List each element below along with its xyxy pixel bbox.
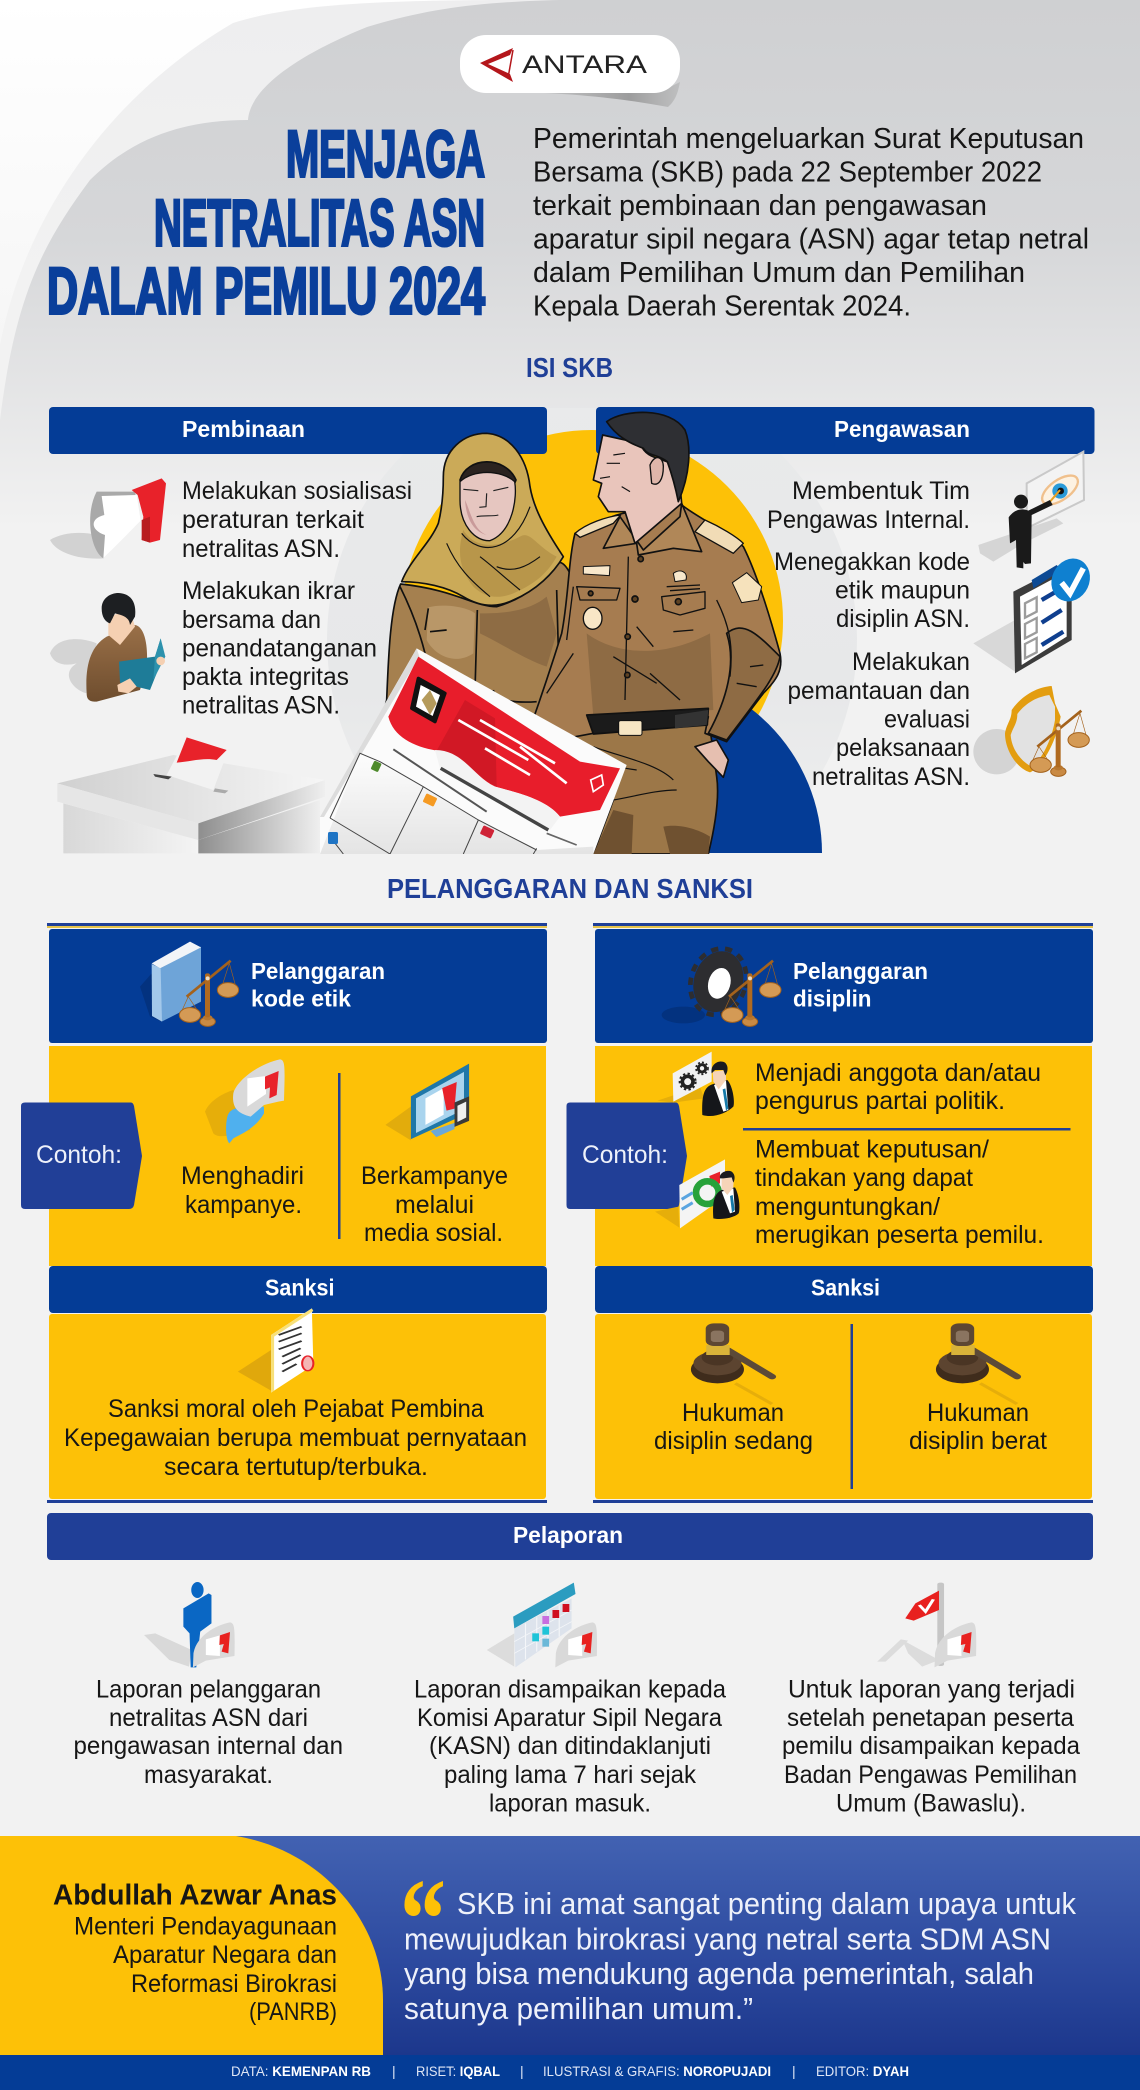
icon: gear and scales xyxy=(662,941,781,1026)
text: Pengawasan items: Membentuk Tim xyxy=(792,477,970,505)
text: Untuk laporan xyxy=(782,1676,1080,1818)
intro text: Bersama (SKB) pada 22 September 2022 xyxy=(533,156,1042,188)
text: Hukuman disiplin berat: Hukuman xyxy=(927,1399,1029,1427)
icon: ballot box xyxy=(57,737,325,853)
text: Membuat keputusan: tindakan yang dapat xyxy=(755,1164,973,1192)
text: Pengawasan items: pelaksanaan xyxy=(836,734,970,762)
tab: Contoh right: Contoh: xyxy=(582,1141,668,1169)
text: Pengawasan items: Melakukan xyxy=(852,648,970,676)
text: Pembinaan items: netralitas ASN. xyxy=(182,535,340,563)
text: Pembinaan items xyxy=(182,477,412,720)
text: Untuk laporan: Untuk laporan yang terjadi xyxy=(788,1676,1075,1704)
tab: Contoh left: Contoh: xyxy=(36,1141,122,1169)
footer credits: ILUSTRASI & GRAFIS: NOROPUJADI xyxy=(543,2063,771,2079)
panel: speaker block: Abdullah Azwar Anas xyxy=(53,1880,337,1912)
panel header: Pengawasan: Pengawasan xyxy=(834,416,970,442)
icon: checklist clipboard xyxy=(973,552,1097,673)
quote text: SKB ini amat sangat penting dalam upaya untuk xyxy=(457,1886,1076,1921)
text: Pembinaan items: Melakukan ikrar xyxy=(182,577,355,605)
icon: flag report xyxy=(877,1583,976,1667)
tab: Contoh left xyxy=(21,1102,142,1209)
panel: speaker block xyxy=(0,1836,383,2055)
text: Pengawasan items: netralitas ASN. xyxy=(812,763,970,791)
figure: man xyxy=(530,412,781,854)
text: Laporan pelanggaran: Laporan pelanggaran xyxy=(96,1676,321,1704)
panel: right column (disiplin) xyxy=(593,923,1093,1503)
panel header: Pelaporan xyxy=(47,1513,1093,1560)
text: Untuk laporan: pemilu disampaikan kepada xyxy=(782,1732,1080,1760)
text: Membuat keputusan: Membuat keputusan/ xyxy=(755,1136,989,1164)
title: MENJAGA xyxy=(286,116,485,190)
heading: Sanksi left: Sanksi xyxy=(265,1274,334,1300)
divider and text: Menghadiri kampanye: Menghadiri xyxy=(181,1162,304,1190)
logo: Antara xyxy=(460,35,680,107)
text: Menjadi anggota: Menjadi anggota dan/atau xyxy=(755,1059,1041,1087)
footer credits: | xyxy=(792,2063,796,2079)
icon: statement document xyxy=(238,1308,313,1393)
title xyxy=(47,116,485,328)
text: Berkampanye melalui media sosial: Berkampanye xyxy=(361,1162,508,1190)
icon: party member with gears xyxy=(657,1052,734,1116)
divider and text: Hukuman disiplin sedang xyxy=(654,1324,853,1489)
intro text: Kepala Daerah Serentak 2024. xyxy=(533,290,911,322)
heading: Pelanggaran disiplin xyxy=(793,958,928,1012)
intro text xyxy=(533,123,1089,322)
text: Pembinaan items: bersama dan xyxy=(182,606,321,634)
panel: speaker block: Aparatur Negara dan xyxy=(113,1941,337,1969)
panel header: Pembinaan xyxy=(49,407,547,454)
icon: decision maker with chart xyxy=(655,1159,739,1228)
text: Laporan pelanggaran: netralitas ASN dari xyxy=(109,1704,308,1732)
intro text: dalam Pemilihan Umum dan Pemilihan xyxy=(533,257,1025,289)
intro text: Pemerintah mengeluarkan Surat Keputusan xyxy=(533,123,1084,155)
text: Menjadi anggota: pengurus partai politik. xyxy=(755,1087,1005,1115)
quote text xyxy=(404,1886,1076,2026)
divider and text: Hukuman disiplin sedang: Hukuman xyxy=(682,1399,784,1427)
text: Laporan disampaikan: paling lama 7 hari sejak xyxy=(444,1761,696,1789)
text: Sanksi moral: secara tertutup/terbuka. xyxy=(164,1453,428,1481)
text: Untuk laporan: Badan Pengawas Pemilihan xyxy=(784,1761,1077,1789)
panel: left column (kode etik) xyxy=(47,923,547,1503)
footer credits: RISET: IQBAL xyxy=(416,2063,500,2079)
icon: eye and inspector xyxy=(978,452,1084,568)
text: Berkampanye melalui media sosial: melalui xyxy=(395,1191,474,1219)
panel: speaker block: Reformasi Birokrasi xyxy=(131,1970,337,1998)
text: Membuat keputusan xyxy=(755,1136,1044,1249)
text: Laporan disampaikan: Laporan disampaikan kepada xyxy=(414,1676,726,1704)
figure: woman xyxy=(380,433,570,727)
panel: speaker block: Menteri Pendayagunaan xyxy=(74,1912,337,1940)
quote text: satunya pemilihan umum.” xyxy=(404,1991,753,2026)
text: Membuat keputusan: merugikan peserta pemilu. xyxy=(755,1221,1044,1249)
tab: Contoh right xyxy=(566,1102,687,1209)
text: Pengawasan items: evaluasi xyxy=(884,706,970,734)
text: Pengawasan items: Menegakkan kode xyxy=(774,548,970,576)
heading: Pelanggaran disiplin: disiplin xyxy=(793,986,872,1012)
text: Pembinaan items: netralitas ASN. xyxy=(182,692,340,720)
text: Pembinaan items: peraturan terkait xyxy=(182,506,364,534)
text: Laporan disampaikan: (KASN) dan ditindaklanjuti xyxy=(429,1732,711,1760)
icon: shield and scales xyxy=(973,686,1089,776)
text: Membuat keputusan: menguntungkan/ xyxy=(755,1193,940,1221)
illustration: civil servants xyxy=(380,412,781,854)
text: Laporan disampaikan: Komisi Aparatur Sipil Negara xyxy=(417,1704,722,1732)
icon: quotation mark: “ xyxy=(400,1856,446,1983)
text: Pembinaan items: pakta integritas xyxy=(182,663,349,691)
icon: person reading xyxy=(50,593,165,702)
illustration: ballot paper xyxy=(320,648,627,854)
text: Pengawasan items xyxy=(767,477,970,791)
backdrop circles xyxy=(327,430,857,853)
title: DALAM PEMILU 2024 xyxy=(47,254,485,328)
icon: blue person report xyxy=(144,1582,235,1667)
text: Untuk laporan: Umum (Bawaslu). xyxy=(836,1790,1026,1818)
heading: Sanksi right: Sanksi xyxy=(811,1274,880,1300)
footer credits: | xyxy=(392,2063,396,2079)
title: NETRALITAS ASN xyxy=(154,186,485,260)
icon: monitor flag xyxy=(385,1064,469,1140)
quote text: mewujudkan birokrasi yang netral serta SDM ASN xyxy=(404,1922,1051,1956)
footer credits: DATA: KEMENPAN RB xyxy=(231,2063,371,2079)
divider and text: Menghadiri kampanye: kampanye. xyxy=(185,1191,302,1219)
text: Pengawasan items: pemantauan dan xyxy=(788,677,970,705)
panel: quote band xyxy=(0,1836,1140,2055)
icon: megaphone xyxy=(50,478,166,559)
icon: calendar report xyxy=(487,1583,597,1667)
text: Untuk laporan: setelah penetapan peserta xyxy=(787,1704,1074,1732)
text: Sanksi moral: Kepegawaian berupa membuat pernyataan xyxy=(64,1424,527,1452)
icon: gavel heavy xyxy=(936,1323,1017,1404)
text: Berkampanye melalui media sosial xyxy=(361,1162,508,1247)
icon: speech bubble flag xyxy=(205,1059,285,1143)
text: Laporan disampaikan xyxy=(414,1676,726,1818)
text: Hukuman disiplin berat xyxy=(909,1399,1047,1455)
text: Pembinaan items: penandatanganan xyxy=(182,634,377,662)
icon: book and scales xyxy=(140,942,239,1026)
quote text: yang bisa mendukung agenda pemerintah, salah xyxy=(404,1956,1034,1991)
footer credits: EDITOR: DYAH xyxy=(816,2063,909,2079)
icon: gavel medium xyxy=(691,1323,772,1404)
heading: Pelanggaran kode etik: Pelanggaran xyxy=(251,958,385,984)
text: Laporan disampaikan: laporan masuk. xyxy=(489,1790,651,1818)
heading: Pelanggaran disiplin: Pelanggaran xyxy=(793,958,928,984)
heading: Isi SKB: ISI SKB xyxy=(526,352,613,383)
intro text: terkait pembinaan dan pengawasan xyxy=(533,190,987,222)
text: Laporan pelanggaran: masyarakat. xyxy=(144,1761,273,1789)
footer credits: | xyxy=(520,2063,524,2079)
panel header: Pembinaan: Pembinaan xyxy=(182,416,305,442)
text: Berkampanye melalui media sosial: media sosial. xyxy=(364,1219,503,1247)
heading: Pelanggaran dan Sanksi: PELANGGARAN DAN SANKSI xyxy=(387,873,753,904)
text: Hukuman disiplin berat: disiplin berat xyxy=(909,1427,1047,1455)
heading: Pelanggaran kode etik: kode etik xyxy=(251,986,351,1012)
panel: speaker block: (PANRB) xyxy=(249,1998,337,2026)
footer credits xyxy=(0,2055,1140,2090)
text: Pengawasan items: disiplin ASN. xyxy=(836,605,970,633)
text: Pengawasan items: Pengawas Internal. xyxy=(767,506,970,534)
text: Pembinaan items: Melakukan sosialisasi xyxy=(182,477,412,505)
intro text: aparatur sipil negara (ASN) agar tetap netral xyxy=(533,224,1089,256)
panel header: Pelaporan: Pelaporan xyxy=(513,1522,623,1548)
text: Sanksi moral xyxy=(64,1395,527,1481)
text: Sanksi moral: Sanksi moral oleh Pejabat Pembina xyxy=(108,1395,484,1423)
text: Pengawasan items: etik maupun xyxy=(835,576,970,604)
text: Laporan pelanggaran: pengawasan internal dan xyxy=(74,1732,343,1760)
logo: Antara: ANTARA xyxy=(522,51,647,79)
panel header: Pengawasan xyxy=(596,407,1094,454)
divider and text: Hukuman disiplin sedang: disiplin sedang xyxy=(654,1427,813,1455)
text: Menjadi anggota xyxy=(743,1059,1070,1130)
heading: Pelanggaran kode etik xyxy=(251,958,385,1012)
divider and text: Menghadiri kampanye xyxy=(181,1073,340,1239)
text: Laporan pelanggaran xyxy=(74,1676,343,1789)
